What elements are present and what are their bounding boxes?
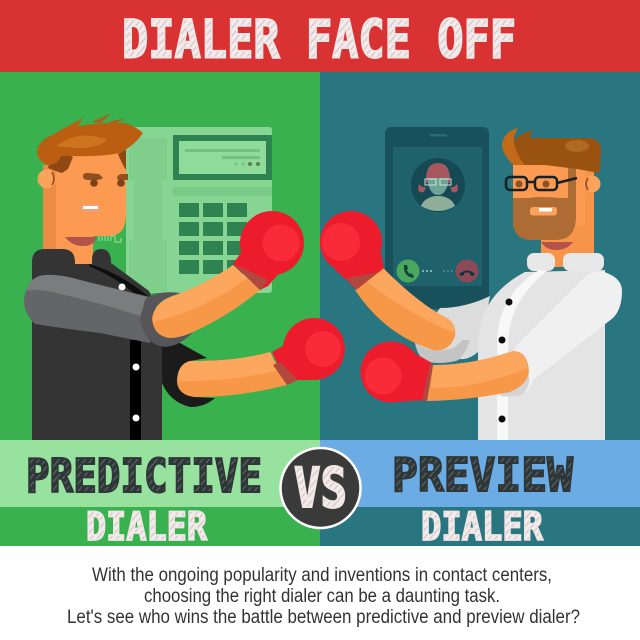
title: DIALER FACE OFF	[122, 10, 516, 70]
band: predictive label	[0, 440, 320, 507]
far arm sleeve	[162, 340, 215, 407]
panel: left green background	[0, 72, 320, 546]
caller avatar	[411, 158, 465, 212]
near forearm	[427, 351, 529, 401]
shirt body	[32, 249, 162, 440]
answer button	[396, 260, 432, 282]
hair	[502, 128, 601, 173]
far forearm	[177, 352, 287, 397]
shirt back sleeve	[415, 296, 490, 363]
glove: predictive lower	[272, 318, 345, 385]
panel: right teal background	[320, 72, 640, 546]
intro paragraph: choosing the right dialer can be a daunting task.	[144, 586, 500, 607]
icon: desk phone	[99, 127, 272, 293]
near sleeve	[24, 275, 193, 347]
glove: predictive upper	[233, 211, 304, 290]
band: preview label	[320, 440, 640, 507]
far forearm	[355, 268, 455, 350]
subheading: left dialer: DIALER	[86, 505, 207, 550]
intro paragraph: Let's see who wins the battle between predictive and preview dialer?	[67, 607, 580, 628]
heading: predictive: PREDICTIVE	[26, 449, 262, 503]
phone display	[173, 135, 272, 180]
decline button	[443, 260, 478, 282]
intro paragraph: With the ongoing popularity and inventions in contact centers,	[92, 565, 552, 586]
icon: smartphone	[385, 127, 489, 309]
boxing gloves	[233, 211, 433, 402]
glove: preview lower	[360, 342, 433, 402]
near forearm	[152, 265, 260, 338]
heading: preview: PREVIEW	[392, 448, 573, 502]
phone keypad	[179, 203, 247, 274]
glasses	[506, 177, 577, 190]
title banner	[0, 0, 640, 72]
hair	[35, 113, 143, 173]
character: predictive dialer boxer	[24, 113, 287, 440]
shirt body	[478, 253, 605, 440]
versus badge	[280, 448, 360, 528]
neck and head	[38, 152, 128, 267]
character: preview dialer boxer	[355, 128, 622, 440]
neck and head	[513, 155, 600, 267]
versus badge: VS	[294, 456, 347, 520]
intro paragraph	[67, 565, 580, 628]
near sleeve	[493, 271, 622, 396]
glove: preview upper	[320, 211, 384, 290]
subheading: right dialer: DIALER	[421, 505, 543, 550]
phone handset	[129, 138, 167, 292]
